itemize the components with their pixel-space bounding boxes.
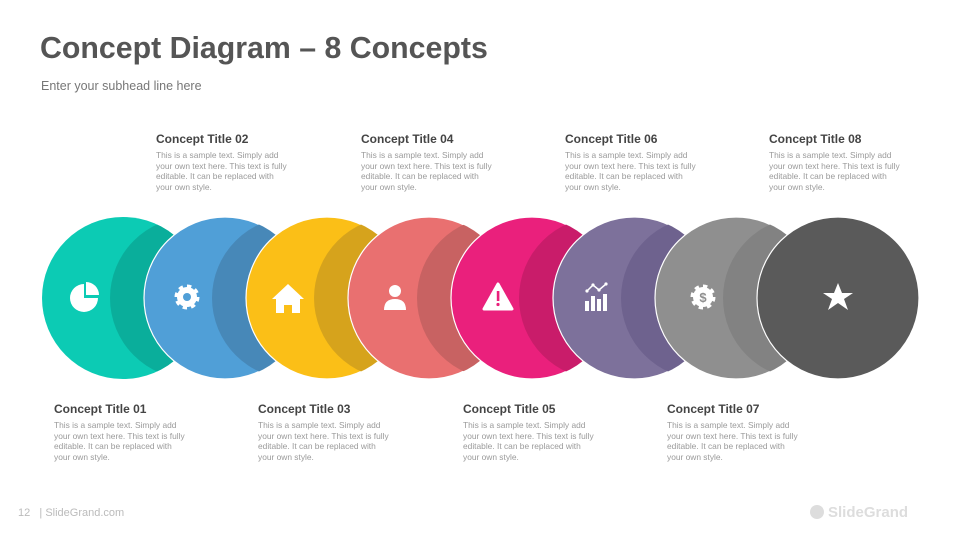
text: concept 05: This is a sample text. Simply add your own text here. This text is fully editable. It can be replaced with your own style. xyxy=(463,420,594,462)
icon: user xyxy=(384,285,406,310)
circle 4 xyxy=(347,218,480,378)
text: concept 02 xyxy=(156,132,287,192)
text: concept 05: Concept Title 05 xyxy=(463,402,555,416)
text: concept 08: Concept Title 08 xyxy=(769,132,861,146)
circle 3 xyxy=(245,218,378,378)
text: concept 04: This is a sample text. Simply add your own text here. This text is fully editable. It can be replaced with your own style. xyxy=(361,150,492,192)
text: concept 04 xyxy=(361,132,492,192)
text: concept 07: Concept Title 07 xyxy=(667,402,759,416)
text: concept 01 xyxy=(54,402,185,462)
text: concept 06 xyxy=(565,132,696,192)
text: concept 01: Concept Title 01 xyxy=(54,402,146,416)
text: concept 06: This is a sample text. Simply add your own text here. This text is fully editable. It can be replaced with your own style. xyxy=(565,150,696,192)
icon: money gear: $ xyxy=(699,290,707,305)
text: concept 07 xyxy=(667,402,798,462)
footer logo: SlideGrand xyxy=(828,504,908,521)
text: concept 01: This is a sample text. Simply add your own text here. This text is fully editable. It can be replaced with your own style. xyxy=(54,420,185,462)
icon: money gear xyxy=(693,287,713,307)
text: concept 02: Concept Title 02 xyxy=(156,132,248,146)
icon: analytics xyxy=(585,282,608,311)
icon: gear xyxy=(177,287,197,307)
circle 5 xyxy=(450,218,582,378)
text: concept 03: This is a sample text. Simply add your own text here. This text is fully editable. It can be replaced with your own style. xyxy=(258,420,389,462)
subhead: Enter your subhead line here xyxy=(41,79,202,93)
text: concept 03: Concept Title 03 xyxy=(258,402,350,416)
text: concept 03 xyxy=(258,402,389,462)
text: concept 04: Concept Title 04 xyxy=(361,132,453,146)
circle 8 xyxy=(757,217,919,379)
text: concept 06: Concept Title 06 xyxy=(565,132,657,146)
footer page number: 12 | SlideGrand.com xyxy=(18,507,124,519)
icon: star xyxy=(823,283,853,310)
circle 1 xyxy=(42,217,174,379)
text: concept 02: This is a sample text. Simply add your own text here. This text is fully editable. It can be replaced with your own style. xyxy=(156,150,287,192)
text: concept 08 xyxy=(769,132,900,192)
circles diagram xyxy=(42,217,918,379)
icon: pie chart xyxy=(70,282,99,312)
circle 7 xyxy=(654,218,786,378)
circle 6 xyxy=(552,218,684,378)
icon: warning xyxy=(484,284,512,309)
title: Concept Diagram – 8 Concepts xyxy=(40,32,488,65)
text: concept 07: This is a sample text. Simply add your own text here. This text is fully editable. It can be replaced with your own style. xyxy=(667,420,798,462)
text: concept 08: This is a sample text. Simply add your own text here. This text is fully editable. It can be replaced with your own style. xyxy=(769,150,900,192)
icon: home xyxy=(272,284,304,313)
text: concept 05 xyxy=(463,402,594,462)
circle 2 xyxy=(143,218,276,378)
